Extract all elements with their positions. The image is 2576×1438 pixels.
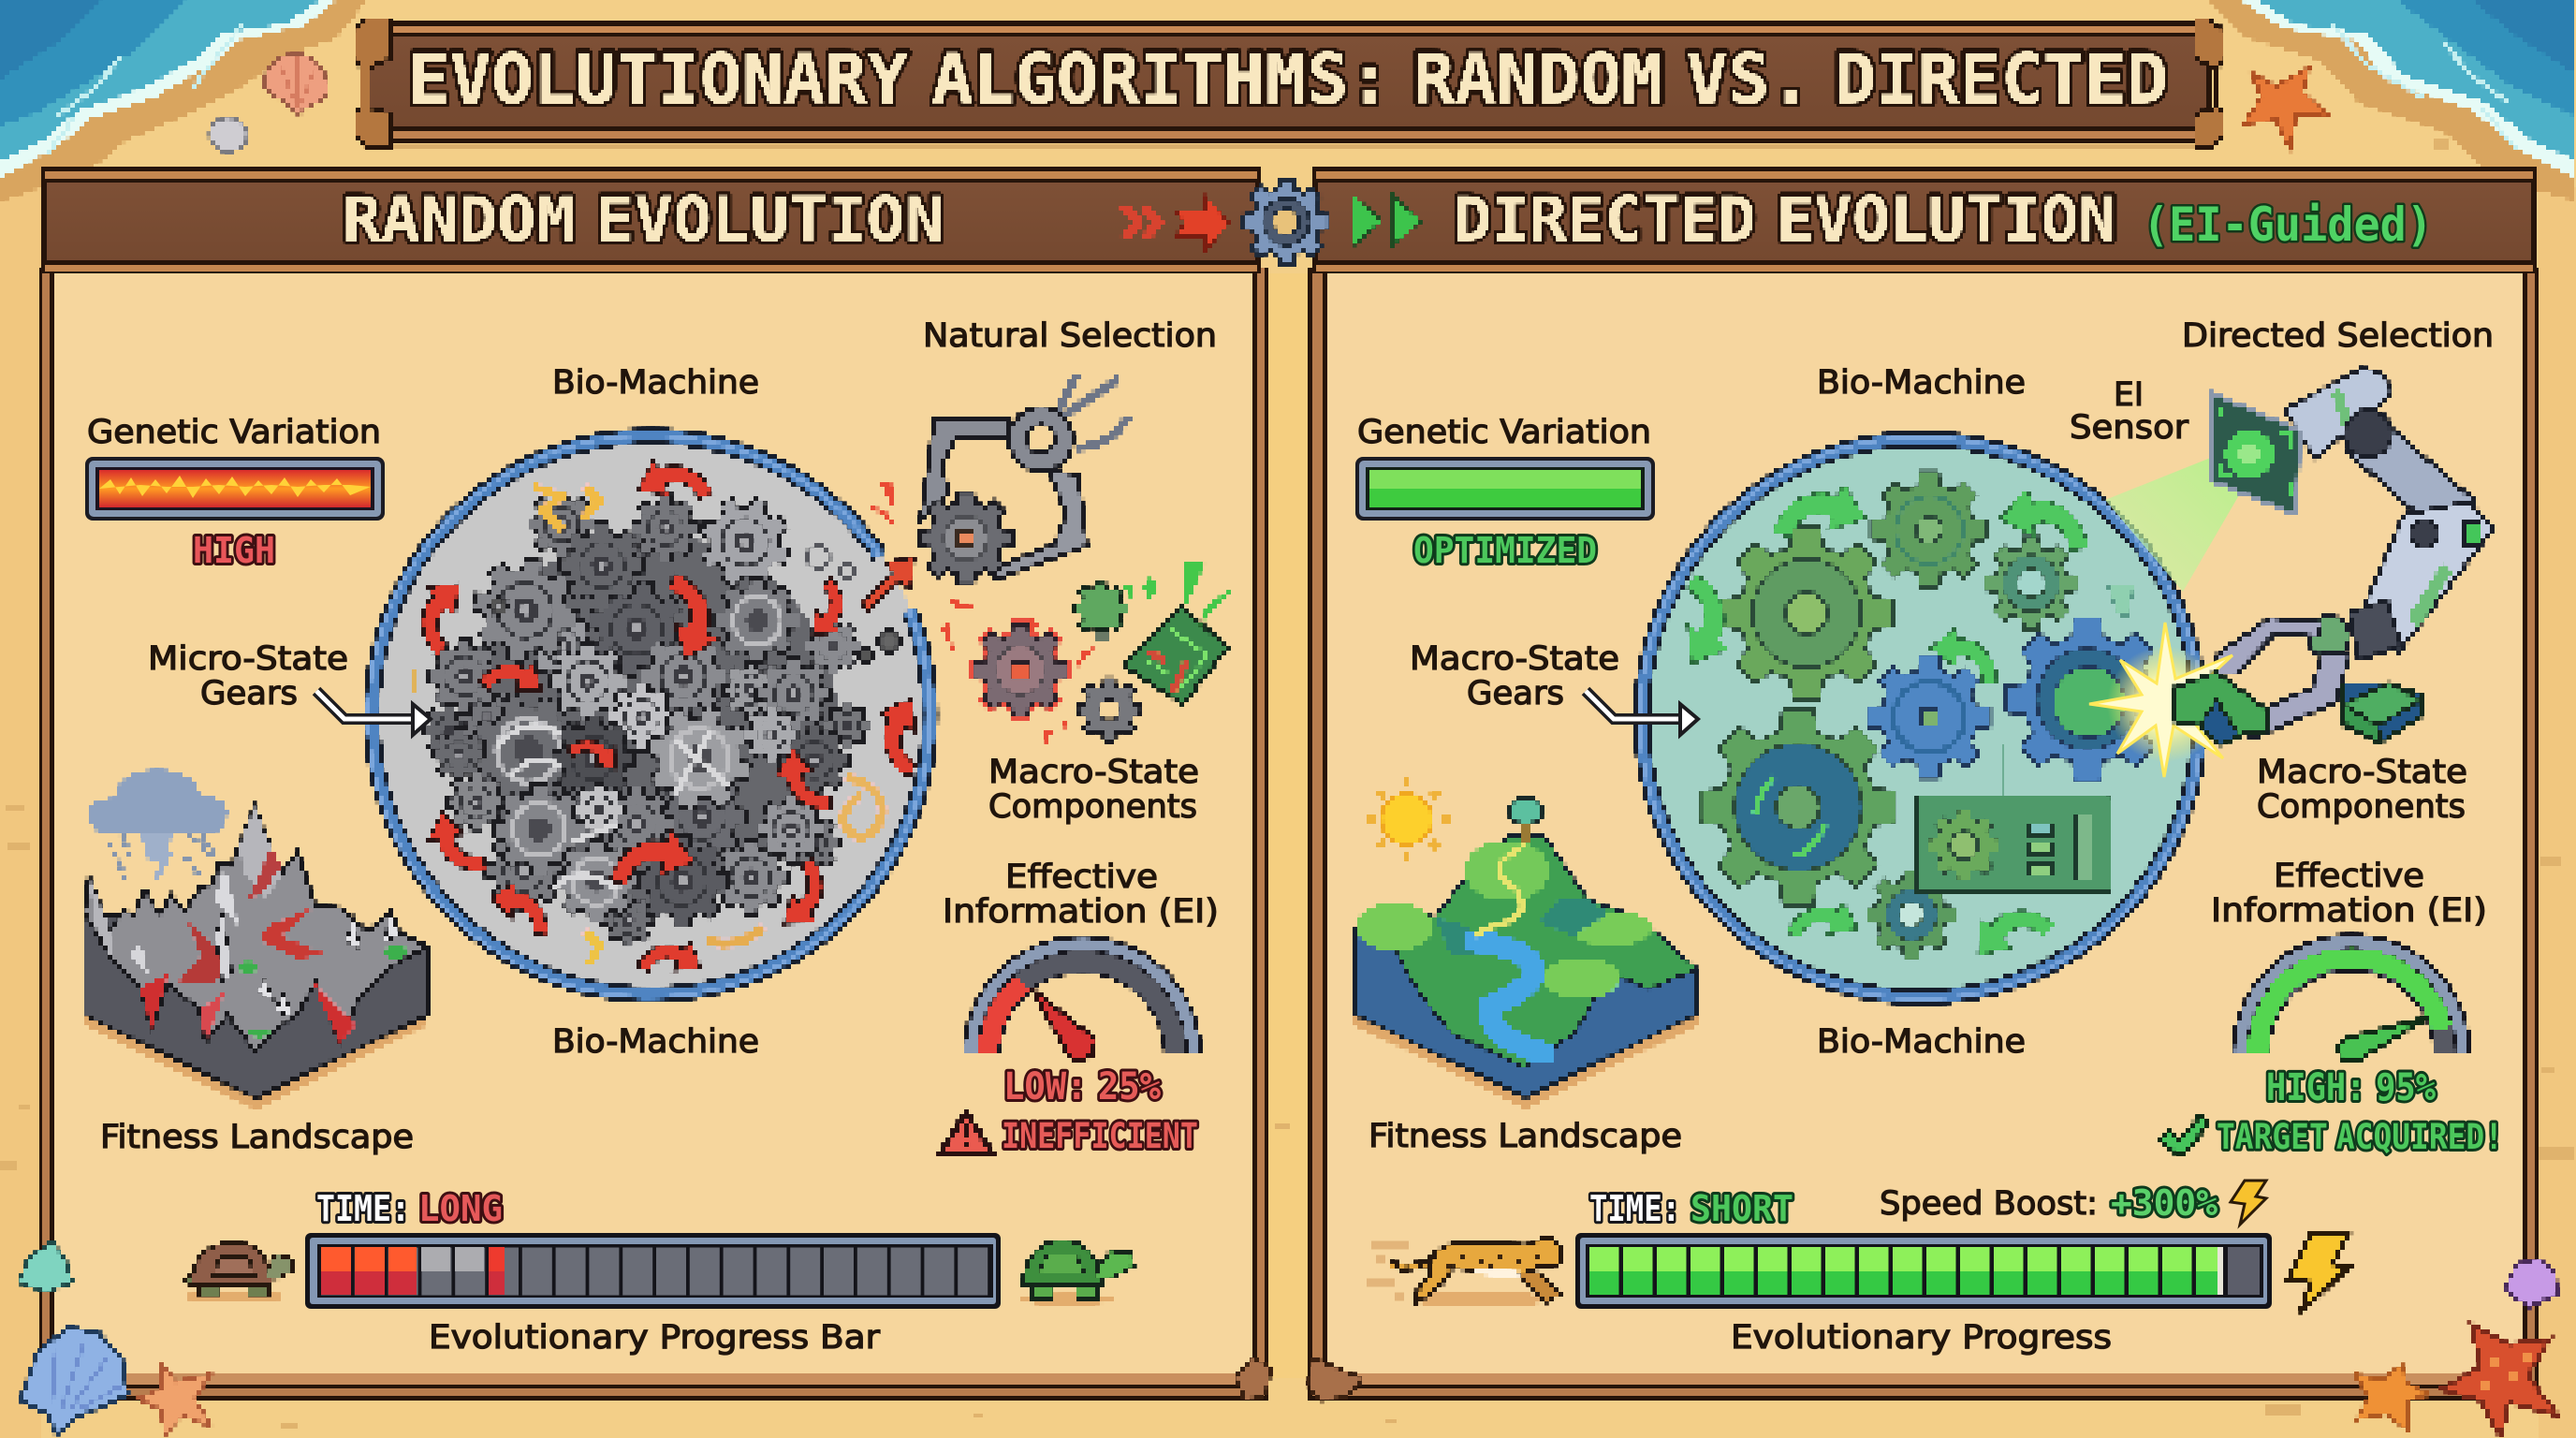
status: high: HIGH [193, 530, 275, 571]
progress bar: random, mostly empty [305, 1233, 1001, 1309]
arrow: macro-state pointer [1586, 691, 1698, 735]
EI-guided tag: (EI-Guided) [2143, 198, 2433, 252]
readout: target acquired: TARGET ACQUIRED! [2217, 1117, 2503, 1157]
genetic variation bar [85, 457, 385, 521]
filled red cells [321, 1247, 505, 1295]
top green gear [1871, 472, 1987, 588]
bottom-left large gear [1700, 709, 1896, 905]
label: bio-machine bottom: Bio-Machine [552, 1023, 759, 1061]
river [1474, 941, 1544, 1053]
gripper wrist [2349, 599, 2401, 660]
icon: large lightning [2289, 1232, 2349, 1313]
label: bio-machine bottom: Bio-Machine [1817, 1023, 2026, 1061]
label: EI sensor: EI [2114, 376, 2144, 414]
yellow path [1474, 838, 1526, 936]
label: time long [316, 1188, 503, 1229]
readout: low 25 percent: LOW: 25% [1003, 1065, 1161, 1108]
label: macro-state components: Macro-State [988, 754, 1199, 791]
status: optimized: OPTIMIZED [1413, 530, 1597, 571]
left header text: RANDOM EVOLUTION [343, 183, 944, 256]
teal-hole gear [1985, 537, 2077, 629]
icon: red sparks [869, 482, 1093, 744]
frame corner scroll left panel [1236, 1357, 1271, 1401]
storm cloud [87, 770, 227, 885]
icon: warning triangle [941, 1112, 992, 1153]
readout: high 95 percent: HIGH: 95% [2266, 1066, 2436, 1109]
label: effective information: Effective [1005, 858, 1158, 896]
icon: damaged gear [969, 619, 1072, 722]
gauge: low EI [972, 945, 1193, 1063]
label: natural selection: Natural Selection [923, 317, 1217, 355]
chaotic bio-machine circle [369, 435, 933, 997]
arrow: escaping red arrow [861, 558, 915, 610]
left panel frame [39, 268, 1268, 1401]
label: speed boost [1880, 1182, 2217, 1224]
label: EI sensor: Sensor [2070, 409, 2189, 447]
green rotation arrows [1681, 483, 2099, 964]
label: macro-state gears: Macro-State [1410, 640, 1619, 678]
icon: purple shell [2505, 1259, 2557, 1307]
icon: sun [1367, 777, 1449, 863]
icon: red starfish [2441, 1324, 2558, 1438]
label: time long: LONG [418, 1188, 503, 1229]
panel: directed evolution [1308, 167, 2539, 1401]
icon: teal shell [19, 1241, 72, 1292]
label: macro-state gears: Gears [1467, 675, 1564, 712]
hill surface [1355, 836, 1697, 1067]
icon: red arrow to center [1120, 197, 1229, 250]
label: EI sensor [2070, 376, 2189, 447]
forearm [2362, 502, 2494, 653]
tangled micro-state gears [423, 485, 871, 946]
blue gear [1868, 656, 1990, 778]
label: directed selection: Directed Selection [2182, 317, 2494, 355]
gripper claws [2217, 618, 2321, 674]
gauge needle [2337, 1018, 2427, 1060]
icon: peach starfish [139, 1365, 212, 1434]
water: top-left corner [0, 0, 367, 201]
label: macro-state components [988, 754, 1199, 826]
circuit board [1917, 744, 2111, 893]
label: time short [1589, 1188, 1793, 1229]
icon: running cheetah [1368, 1236, 1561, 1308]
panel: random evolution [39, 167, 1268, 1401]
label: effective information: Effective [2274, 858, 2424, 895]
icon: small gray gear [1077, 678, 1141, 741]
icon: selection claw [920, 374, 1128, 584]
left section header [41, 167, 1261, 273]
label: time long: TIME: [316, 1188, 410, 1229]
loose scraps [410, 487, 900, 964]
gauge needle [1032, 990, 1095, 1063]
label: micro-state gears: Micro-State [148, 640, 348, 678]
label: speed boost: Speed Boost: [1880, 1185, 2098, 1223]
label: genetic variation: Genetic Variation [87, 414, 381, 451]
icon: blue scallop shell [21, 1328, 127, 1434]
label: macro-state components: Components [988, 788, 1197, 826]
red chaos arrows [406, 461, 922, 976]
icon: pink shell [264, 54, 328, 115]
landscape: jagged fitness landscape [84, 770, 428, 1109]
right panel frame [1308, 268, 2539, 1401]
effect: impact spark [2089, 623, 2232, 777]
macro-state components [969, 562, 1232, 741]
label: macro-state components: Macro-State [2257, 754, 2467, 791]
gauge: high EI [2241, 943, 2462, 1060]
sensor screen [2210, 392, 2300, 515]
progress bar: directed, nearly full [1575, 1233, 2272, 1309]
upper arm [2285, 369, 2392, 459]
icon: check mark [2160, 1116, 2209, 1157]
jagged ridge [84, 807, 428, 1050]
label: effective information: Information (EI) [943, 893, 1219, 931]
icon: green turtle [1020, 1240, 1134, 1305]
arrow: micro-state pointer [316, 691, 431, 735]
label: time short: TIME: [1589, 1188, 1680, 1229]
large green gear [1720, 527, 1893, 699]
icon: orange starfish bottom [2355, 1365, 2429, 1431]
label: micro-state gears [148, 640, 348, 712]
label: evolutionary progress bar: Evolutionary Progress Bar [429, 1319, 881, 1357]
label: time short: SHORT [1690, 1188, 1793, 1229]
genetic variation bar [1355, 457, 1655, 521]
label: bio-machine top: Bio-Machine [552, 364, 759, 402]
summit marker [1509, 798, 1543, 843]
icon: grey pebble [210, 118, 247, 152]
right section header [1312, 167, 2537, 273]
small bottom gear [1867, 871, 1955, 959]
value: plus 300 percent: +300% [2111, 1182, 2217, 1224]
readout: inefficient: INEFFICIENT [1002, 1116, 1198, 1156]
label: bio-machine top: Bio-Machine [1817, 364, 2026, 402]
icon: brown slow turtle [184, 1242, 293, 1303]
component: loose block [2343, 683, 2422, 743]
icon: orange starfish top [2245, 67, 2328, 150]
organized bio-machine circle [1640, 437, 2202, 999]
right header text: DIRECTED EVOLUTION [1454, 183, 2116, 256]
label: micro-state gears: Gears [200, 675, 298, 712]
icon: green gear fragment [1074, 581, 1128, 640]
sensor beam [2105, 457, 2243, 592]
title banner [356, 19, 2223, 149]
label: effective information [943, 858, 1219, 931]
component: held block [2174, 672, 2269, 744]
water: top-right corner [2209, 0, 2576, 201]
icon: green sparks [1123, 562, 1232, 625]
icon: small lightning [2231, 1181, 2266, 1225]
icon: green circuit tile [1123, 606, 1227, 704]
icon: green double arrows [1353, 195, 1421, 246]
label: fitness landscape: Fitness Landscape [1368, 1118, 1682, 1155]
label: effective information [2211, 858, 2487, 930]
engaged blue gear [2006, 618, 2169, 781]
banner corner brackets [356, 19, 2223, 148]
icon: central gear connector [1244, 180, 1328, 264]
label: macro-state gears [1410, 640, 1619, 712]
frame corner scroll right panel [1309, 1357, 1362, 1401]
label: evolutionary progress: Evolutionary Progress [1731, 1319, 2112, 1357]
label: macro-state components: Components [2257, 788, 2466, 826]
title text: EVOLUTIONARY ALGORITHMS: RANDOM VS. DIRECTED [408, 39, 2168, 120]
landscape: smooth fitness landscape [1354, 777, 1697, 1108]
label: fitness landscape: Fitness Landscape [100, 1119, 414, 1156]
label: macro-state components [2257, 754, 2467, 826]
icon: robot arm with sensor [2210, 369, 2494, 740]
label: genetic variation: Genetic Variation [1357, 414, 1651, 451]
label: effective information: Information (EI) [2211, 892, 2487, 930]
